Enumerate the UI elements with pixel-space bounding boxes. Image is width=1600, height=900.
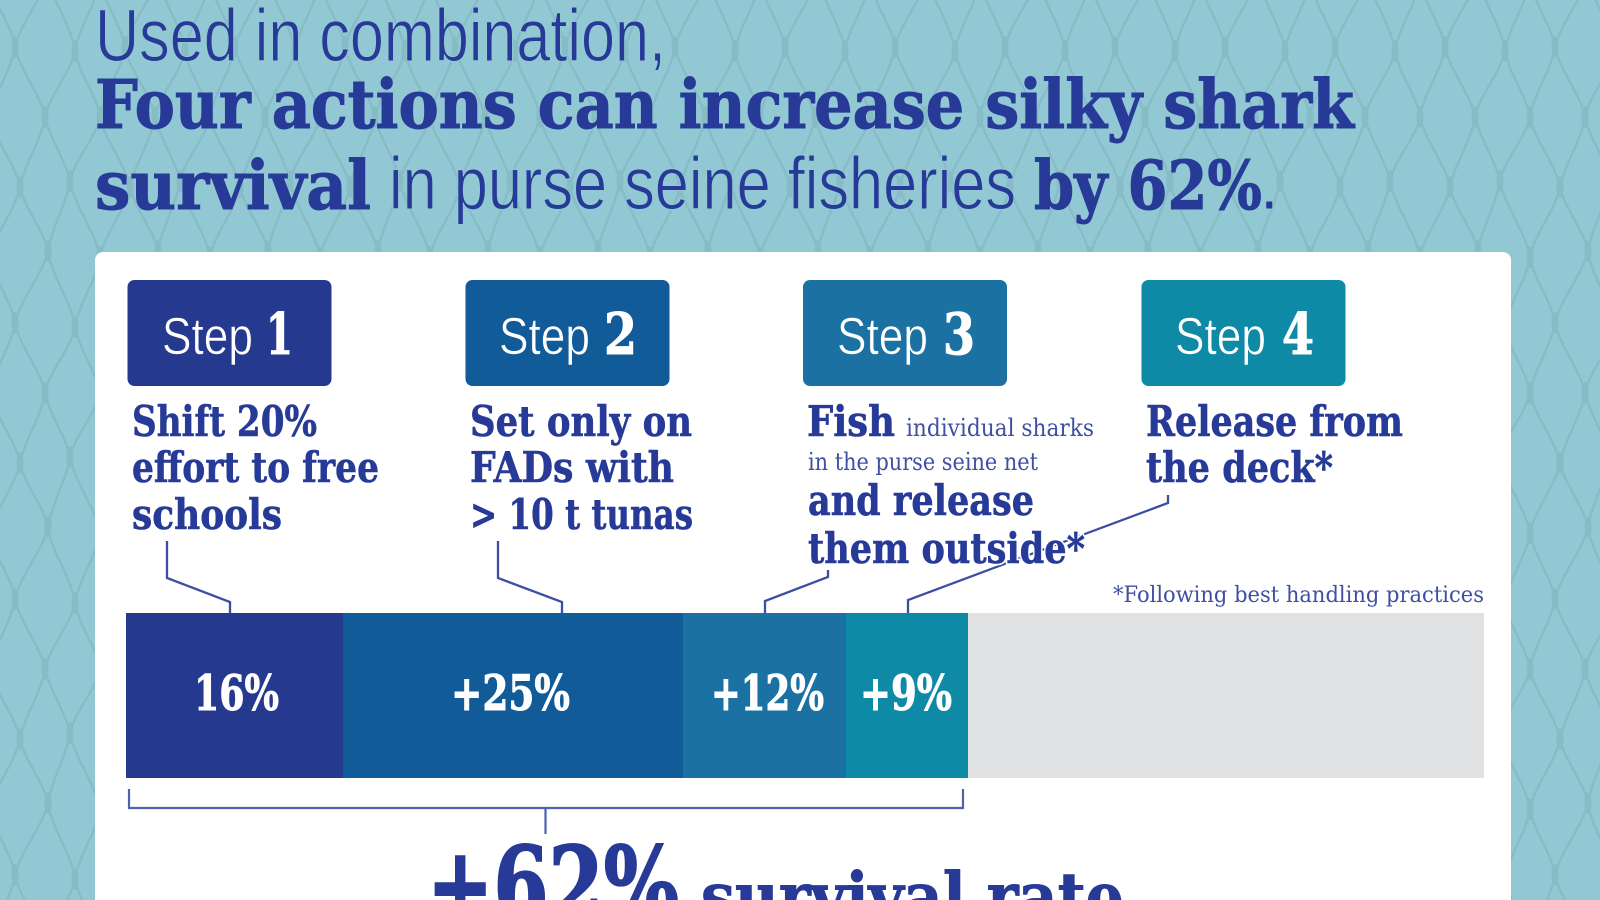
text: step 3 second line halo: them outside*: [808, 524, 1085, 573]
title: survival: [95, 146, 371, 225]
segment: +12%: +12%: [711, 664, 824, 722]
title: Four actions can increase silky shark: [95, 65, 1355, 144]
segment: +25%: [343, 613, 683, 778]
title: by 62%: [1034, 146, 1262, 225]
text: step 2 action: > 10 t tunas: [470, 490, 693, 539]
stacked bar chart: [126, 613, 1484, 778]
badge: step 3: 3: [943, 301, 975, 368]
step 3: [803, 280, 1094, 525]
connector lines: [167, 495, 1168, 613]
text: step 1 action: effort to free: [132, 443, 379, 492]
segment: 16%: [126, 613, 343, 778]
badge: step 2: Step: [499, 308, 590, 366]
text: step 1 action: [132, 397, 379, 539]
segment: +12%: [683, 613, 846, 778]
footnote: *Following best handling practices: [1113, 583, 1484, 608]
bracket: [129, 789, 963, 834]
text: step 3 action: in the purse seine net: [808, 448, 1038, 476]
badge: step 2: 2: [604, 301, 637, 368]
segment: +9%: [846, 613, 968, 778]
text: step 2 action: Set only on: [470, 397, 692, 446]
segment: 16%: 16%: [194, 664, 279, 722]
text: step 4 action: the deck*: [1146, 443, 1333, 492]
segment: +25%: +25%: [451, 664, 570, 722]
badge: step 1: 1: [266, 301, 293, 368]
badge: step 2: [466, 280, 670, 386]
text: step 2 action: FADs with: [470, 443, 674, 492]
step 4: [1142, 280, 1403, 492]
badge: step 1: [128, 280, 332, 386]
text: step 4 action: [1146, 397, 1403, 492]
badge: step 4: Step: [1175, 308, 1266, 366]
text: step 3 action: Fish: [807, 397, 895, 446]
result: survival rate: [427, 823, 1124, 900]
panel: white card: [95, 252, 1511, 900]
title: .: [1259, 142, 1280, 225]
text: step 2 action: [470, 397, 693, 539]
segment: +9%: +9%: [860, 664, 952, 722]
title: [95, 0, 1355, 225]
badge: step 4: 4: [1282, 301, 1314, 368]
text: step 3 action: individual sharks: [906, 414, 1094, 442]
text: step 4 action: Release from: [1146, 397, 1403, 446]
text: step 3 action: [807, 397, 1094, 525]
badge: step 3: Step: [837, 308, 928, 366]
text: step 1 action: schools: [132, 490, 282, 539]
text: step 3 action: and release: [808, 476, 1034, 525]
title: in purse seine fisheries: [389, 142, 1016, 225]
badge: step 4: [1142, 280, 1346, 386]
step 2: [466, 280, 693, 539]
badge: step 1: Step: [162, 308, 253, 366]
text: step 3 second line: them outside*: [808, 524, 1085, 573]
badge: step 3: [803, 280, 1007, 386]
step 1: [128, 280, 379, 539]
text: step 1 action: Shift 20%: [132, 397, 317, 446]
